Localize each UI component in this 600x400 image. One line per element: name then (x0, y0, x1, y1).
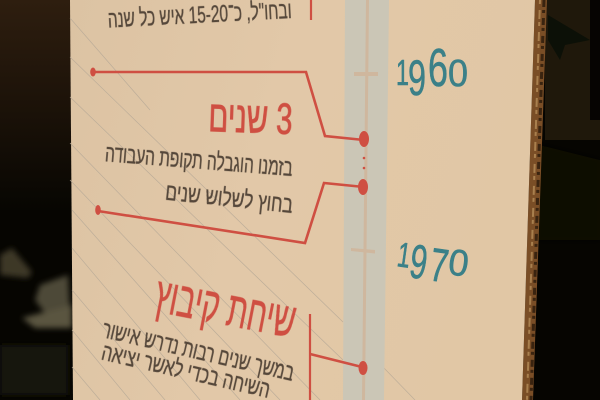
year 1960: 0 (448, 53, 468, 95)
timeline band (343, 0, 389, 400)
year 1970: 0 (446, 241, 471, 285)
year 1960 (396, 38, 468, 106)
poster sheet (70, 0, 535, 400)
body text: 3 years line 2: בחוץ לשלוש שנים (164, 179, 294, 219)
heading: kibbutz talk: שיחת קיבוץ (151, 267, 301, 349)
connector 1 (90, 68, 369, 147)
year 1960: 1 (396, 52, 409, 93)
year 1970 (395, 235, 471, 292)
tick 1960 (354, 72, 378, 76)
heading: 3 years: 3 שנים (208, 92, 293, 144)
year 1970: 9 (406, 235, 431, 290)
year 1960: 9 (408, 50, 426, 106)
timeline axis (362, 0, 369, 400)
connector 2 (95, 179, 368, 243)
timeline dots (363, 157, 365, 169)
plywood board edge (522, 0, 547, 400)
connector 3 (310, 314, 368, 400)
year 1970: 7 (427, 237, 452, 292)
diagonal pattern lines (70, 18, 415, 400)
body text: 3 years line 1: בזמנו הוגבלה תקופת העבודה (104, 140, 294, 182)
year 1960: 6 (428, 38, 448, 98)
year 1970: 1 (395, 235, 413, 276)
top connector stub (310, 0, 312, 20)
tick 1970 (351, 248, 375, 254)
fabric and plants at lower left (0, 248, 72, 395)
